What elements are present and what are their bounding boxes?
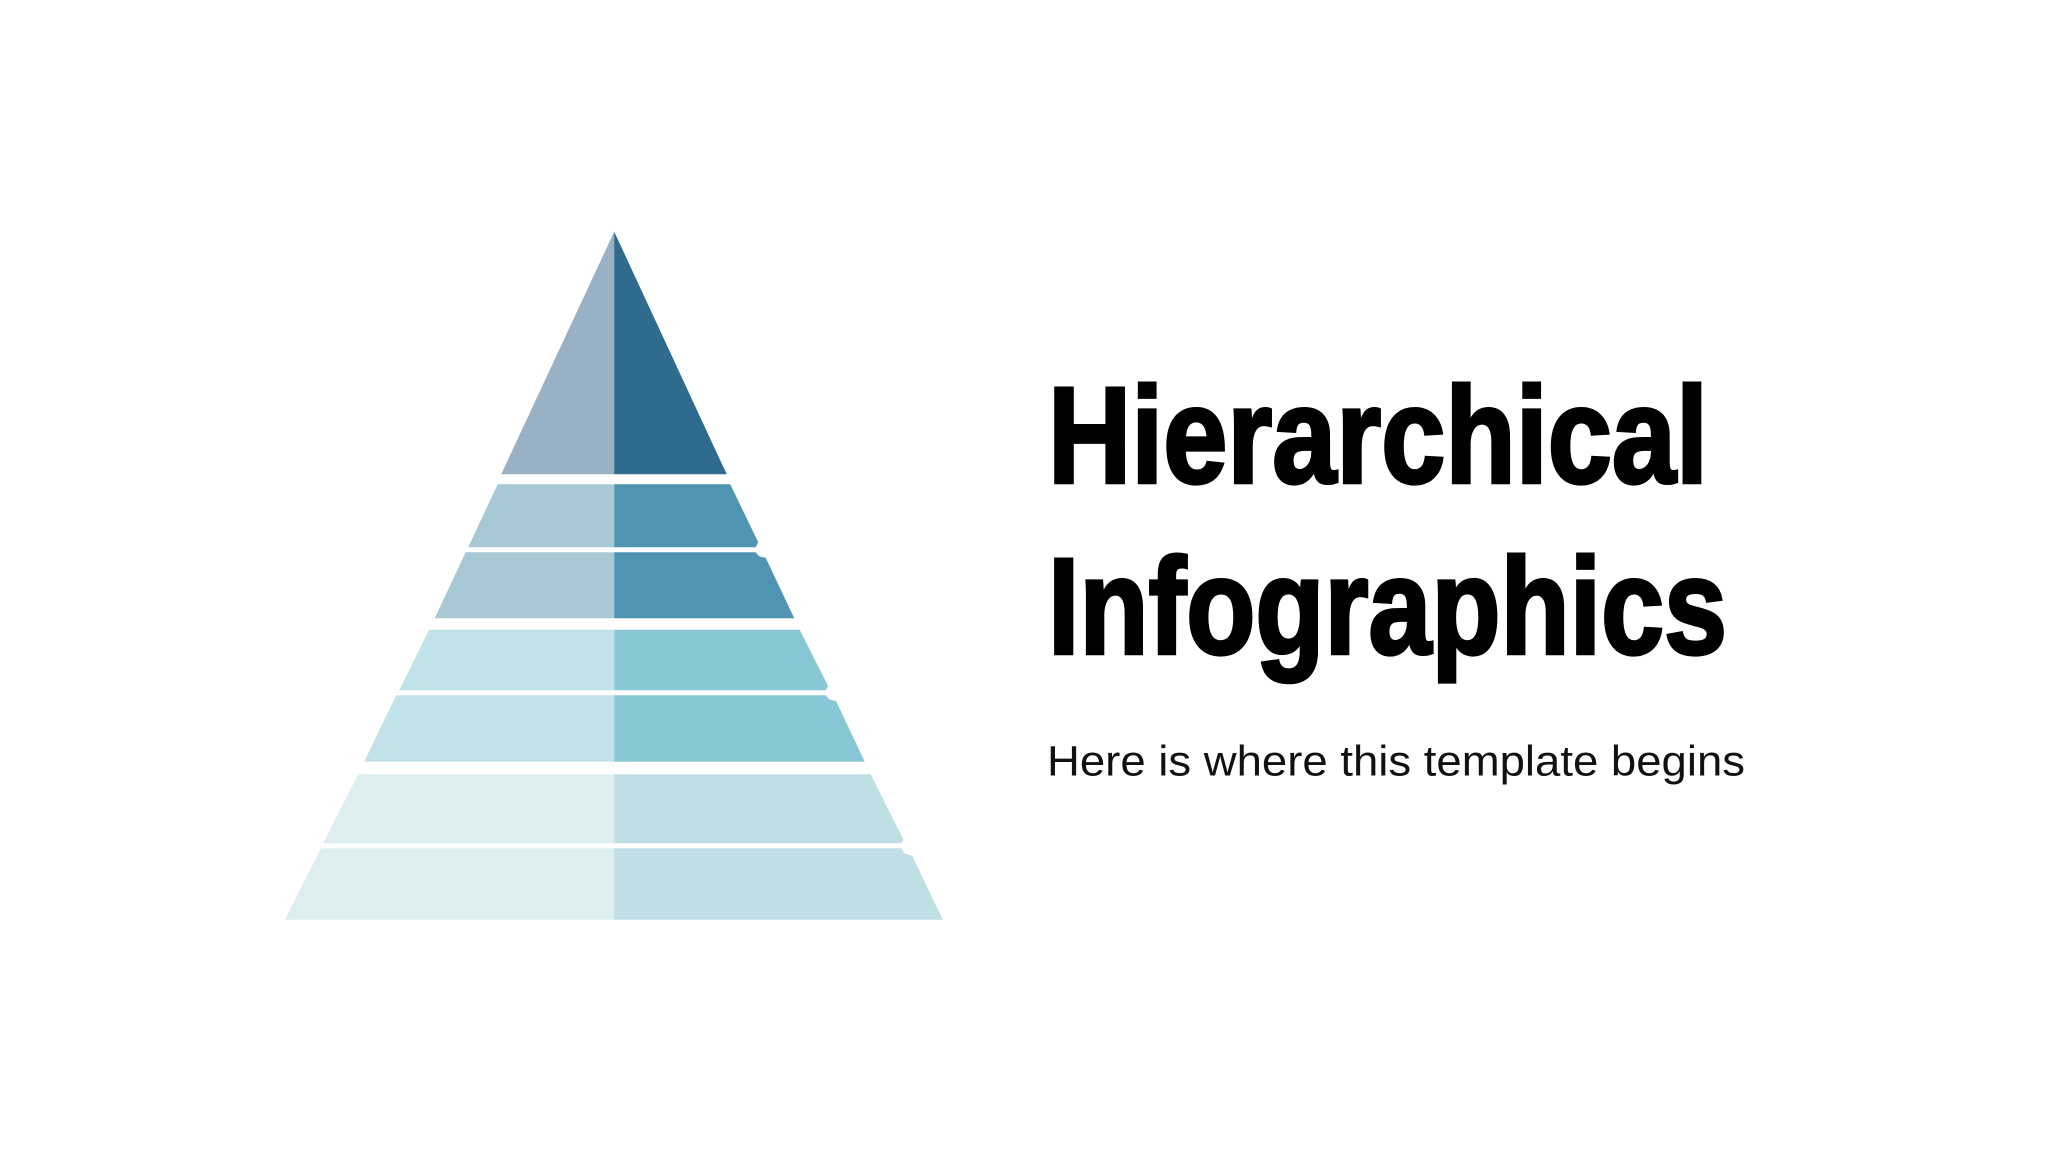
tier 7: base band of the pale pair [285,848,943,920]
title: Hierarchical [1048,360,1708,512]
tier 4: upper band of the mid teal pair [399,630,828,690]
title: Infographics [1048,530,1727,684]
subtitle: Here is where this template begins [1047,738,1745,786]
tier 5: lower band of the mid teal pair [364,695,865,762]
tier 1: apex triangle [501,232,727,474]
title [1048,360,1727,684]
tier 6: upper band of the pale pair [323,774,903,843]
tier 3: lower band of the dark teal pair [435,552,794,618]
tier 2: upper band [468,484,758,547]
pyramid chart [285,232,943,920]
